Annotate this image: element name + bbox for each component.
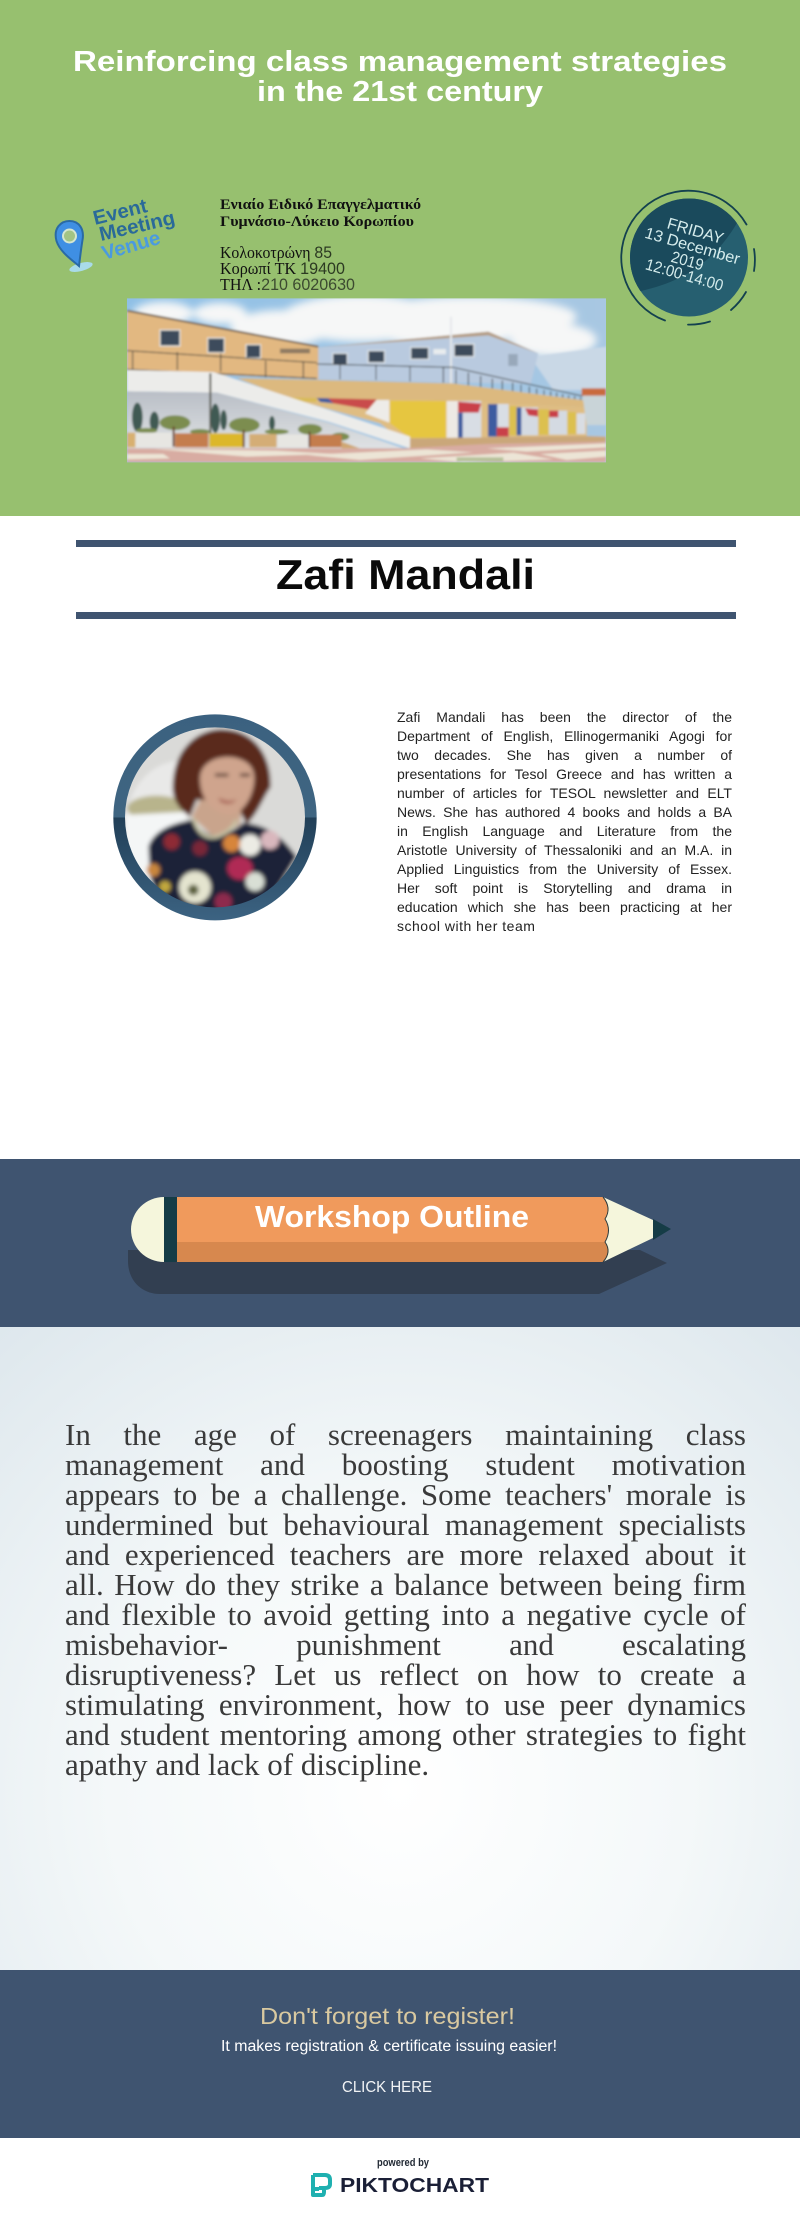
registration note: It makes registration & certificate issuing easier! — [221, 2038, 557, 2055]
venue address: Κολοκοτρώνη 85 — [220, 243, 332, 262]
speaker biography: Department of English, Ellinogermaniki Agogi for — [397, 728, 732, 744]
workshop outline text — [65, 1417, 746, 1782]
date badge: 12:00-14:00 — [643, 256, 725, 295]
date badge: 2019 — [669, 249, 706, 274]
panel: workshop outline band — [0, 1159, 800, 1327]
title: Reinforcing class management strategies — [73, 46, 727, 78]
venue label: Venue — [99, 227, 163, 265]
call to action: CLICK HERE — [342, 2079, 432, 2096]
speaker portrait — [113, 714, 317, 920]
workshop outline text: undermined but behavioural management specialists — [65, 1507, 746, 1542]
venue address: Κορωπί ΤΚ 19400 — [220, 259, 345, 278]
speaker name: Zafi Mandali — [276, 551, 535, 598]
footer: piktochart logo — [313, 2157, 489, 2197]
venue address: ΤΗΛ :210 6020630 — [220, 275, 355, 294]
venue address — [220, 197, 421, 294]
icon: pencil — [128, 1197, 671, 1294]
pencil label: Workshop Outline — [255, 1199, 529, 1234]
workshop outline text: stimulating environment, how to use peer dynamics — [65, 1687, 746, 1722]
title — [73, 46, 727, 108]
venue address: Ενιαίο Ειδικό Επαγγελματικό — [220, 197, 421, 213]
workshop outline text: appears to be a challenge. Some teachers' morale is — [65, 1477, 746, 1512]
speaker biography: Aristotle University of Thessaloniki and an M.A. in — [397, 842, 732, 858]
workshop outline text: In the age of screenagers maintaining class — [65, 1417, 746, 1452]
title: in the 21st century — [257, 76, 543, 108]
workshop outline text: and experienced teachers are more relaxed about it — [65, 1537, 746, 1572]
panel: outline background — [0, 1327, 800, 1970]
school photo — [127, 298, 606, 462]
footer: piktochart logo: powered by — [377, 2157, 430, 2169]
workshop outline text: all. How do they strike a balance between being firm — [65, 1567, 746, 1602]
venue label — [91, 195, 177, 265]
speaker biography: two decades. She has given a number of — [397, 747, 732, 763]
icon: venue pin — [56, 221, 94, 274]
workshop outline text: misbehavior- punishment and escalating — [65, 1627, 746, 1662]
footer: piktochart logo: PIKTOCHART — [340, 2175, 489, 2197]
venue address: Γυμνάσιο-Λύκειο Κορωπίου — [220, 214, 414, 230]
speaker biography: in English Language and Literature from the — [397, 823, 732, 839]
workshop outline text: management and boosting student motivation — [65, 1447, 746, 1482]
workshop outline text: and student mentoring among other strategies to fight — [65, 1717, 746, 1752]
speaker biography: education which she has been practicing at her — [397, 899, 732, 915]
speaker biography: school with her team — [397, 918, 535, 934]
speaker biography: Applied Linguistics from the University of Essex. — [397, 861, 732, 877]
workshop outline text: and flexible to avoid getting into a negative cycle of — [65, 1597, 746, 1632]
panel: header — [0, 0, 800, 516]
speaker biography: number of articles for TESOL newsletter and ELT — [397, 785, 732, 801]
registration heading: Don't forget to register! — [260, 2003, 515, 2029]
workshop outline text: apathy and lack of discipline. — [65, 1747, 429, 1782]
venue label: Event — [91, 195, 150, 230]
date badge: 13 December — [643, 225, 742, 269]
speaker biography: News. She has authored 4 books and holds a BA — [397, 804, 732, 820]
speaker biography — [397, 709, 732, 934]
speaker biography: Zafi Mandali has been the director of the — [397, 709, 732, 725]
speaker biography: Her soft point is Storytelling and drama in — [397, 880, 732, 896]
panel: speaker — [76, 540, 736, 920]
panel: registration band — [0, 1970, 800, 2138]
venue label: Meeting — [97, 207, 177, 246]
workshop outline text: disruptiveness? Let us reflect on how to create a — [65, 1657, 746, 1692]
date badge: FRIDAY — [665, 216, 726, 248]
date badge — [620, 190, 755, 325]
speaker biography: presentations for Tesol Greece and has written a — [397, 766, 732, 782]
